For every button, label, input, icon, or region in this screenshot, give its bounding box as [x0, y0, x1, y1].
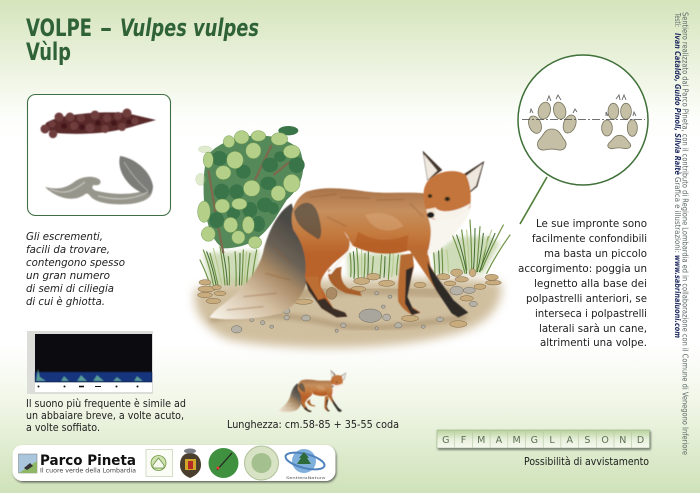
sighting calendar: A [566, 435, 573, 446]
grass [200, 220, 510, 287]
logo: Parco Pineta: Parco Pineta [40, 453, 136, 469]
text: tracks description: interseca i polpastrelli [535, 308, 647, 320]
credits: authors line: Testi: [673, 12, 682, 27]
text: tracks description [518, 218, 647, 349]
credits: authors line: Grafica e illustrazioni: [673, 177, 682, 253]
text: tracks description: altrimenti una volpe. [540, 337, 647, 349]
text: droppings description: un gran numero [26, 270, 110, 282]
text: droppings description: Gli escrementi, [26, 231, 103, 243]
bush leaves dark [209, 126, 305, 232]
sighting calendar: M [477, 435, 485, 446]
logo: municipal crest [180, 448, 201, 478]
text: droppings description: facili da trovare, [26, 244, 110, 256]
sighting calendar: A [496, 435, 503, 446]
ground [194, 278, 502, 348]
icon: scat with cherry seeds [40, 108, 156, 138]
illustration: fox in habitat [194, 126, 510, 348]
sighting calendar: G [531, 435, 538, 446]
sighting calendar: F [461, 435, 466, 446]
credits: authors line [673, 12, 682, 338]
icon: fox paw print [526, 101, 578, 150]
logo: Parco Pineta [18, 453, 136, 474]
text: body length: Lunghezza: cm.58-85 + 35-55 coda [227, 419, 399, 431]
title: Vulpes vulpes [120, 14, 259, 42]
title: VOLPE [26, 14, 92, 42]
sighting calendar: M [512, 435, 521, 446]
icon: dog paw print [602, 103, 637, 149]
text: tracks description: polpastrelli anteriori, se [526, 293, 647, 305]
grass base [203, 237, 500, 285]
text: droppings description: contengono spesso [26, 257, 125, 269]
credits: authors line: www.sabrinaluoni.com [673, 255, 682, 338]
credits: authors line: Ivan Cataldo, Guido Pinoli, Silvia Raitè [673, 33, 682, 175]
text: tracks description: ma basta un piccolo [544, 248, 647, 260]
text: tracks description: laterali sarà un cane, [539, 323, 647, 335]
text: droppings description: di cui è ghiotta. [26, 296, 105, 308]
bush leaves light [196, 131, 300, 248]
panel: droppings [28, 94, 170, 216]
logo: SentieroNatura planet: SentieroNatura [286, 476, 325, 480]
text: tracks description: legnetto alla base dei [534, 278, 647, 290]
panel: paw print comparison [518, 55, 648, 224]
sighting calendar: N [619, 435, 626, 446]
text: sound description [26, 398, 186, 434]
measuring stick [522, 118, 645, 120]
logo: SentieroNatura planet [284, 449, 326, 480]
title [26, 14, 259, 66]
stones [231, 286, 477, 333]
logo bar [12, 445, 336, 481]
logo: Alpini [208, 448, 238, 478]
title: – [100, 14, 112, 42]
bush branches [208, 145, 290, 253]
text: calendar caption: Possibilità di avvistamento [524, 456, 649, 468]
logo: Parco Pineta: Il cuore verde della Lombardia [40, 468, 136, 474]
fox [209, 151, 484, 319]
sighting calendar: D [637, 435, 644, 446]
fallen leaves [198, 269, 501, 327]
sighting calendar: G [442, 435, 449, 446]
icon: grey scat [45, 156, 153, 204]
text: sound description: Il suono più frequente è simile ad [26, 398, 186, 410]
direction arrows [530, 95, 636, 116]
text: sound description: un abbaiare breve, a volte acuto, [26, 410, 184, 422]
illustration: small fox size reference [277, 370, 346, 413]
title: Vùlp [26, 38, 71, 66]
text: droppings description [26, 231, 125, 308]
sighting calendar: L [549, 435, 555, 446]
text: droppings description: di semi di ciliegia [26, 283, 114, 295]
sighting calendar: S [584, 435, 590, 446]
bush foliage base [204, 135, 303, 248]
chart: sound spectrogram [27, 331, 153, 394]
logo: GEV Lombardia [244, 446, 278, 480]
sighting calendar [437, 430, 650, 448]
text: tracks description: facilmente confondibili [532, 233, 647, 245]
text: tracks description: Le sue impronte sono [536, 218, 647, 230]
sighting calendar: O [601, 435, 609, 446]
callout line [520, 177, 547, 224]
text: sound description: a volte soffiato. [26, 422, 100, 434]
text: tracks description: accorgimento: poggia un [518, 263, 647, 275]
logo: Riviera Parchi [146, 450, 172, 476]
